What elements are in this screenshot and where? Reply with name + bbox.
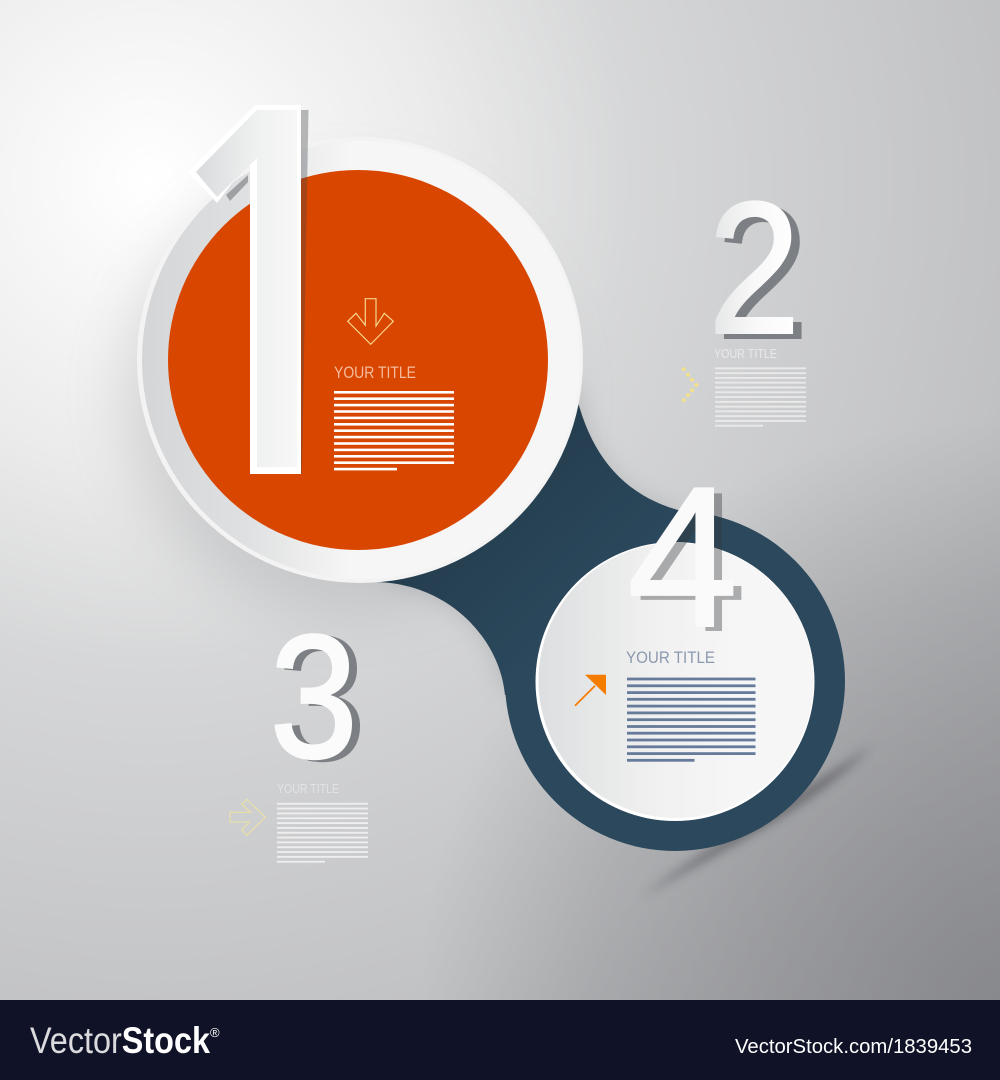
panel: block 2 [682, 346, 806, 427]
image id: VectorStock.com/1839453 [735, 1036, 972, 1058]
text lines [277, 803, 368, 863]
icon: orange arrow [575, 675, 606, 706]
footer banner [0, 1000, 1000, 1080]
dark ring [505, 511, 845, 851]
numeral 3 face: 3 [270, 599, 358, 795]
icon: right arrow [230, 799, 265, 835]
heading: YOUR TITLE [714, 346, 777, 361]
panel: large circle [137, 137, 583, 583]
panel: white disc [536, 542, 814, 821]
numeral 3 [270, 599, 366, 797]
soft shadow around connector [380, 380, 680, 700]
numeral 2 face: 2 [709, 165, 800, 373]
numeral 3 shadow: 3 [278, 601, 366, 797]
logo wordmark: VectorStock [30, 1020, 210, 1061]
soft shadow under the large circle [125, 180, 555, 610]
panel: block 4 [575, 648, 756, 762]
icon: down arrow [348, 299, 393, 344]
numeral 1 [196, 105, 308, 474]
panel: block 3 [230, 782, 368, 863]
heading: YOUR TITLE [277, 782, 339, 796]
outer ring edge [137, 137, 583, 583]
numeral 1 edge: 1 [124, 0, 423, 589]
text lines [334, 391, 454, 470]
disc highlight edge [536, 542, 814, 821]
outer ring face [142, 141, 580, 579]
connector shape [375, 375, 700, 700]
numeral 2 [708, 165, 809, 378]
text lines [627, 678, 756, 762]
dark connector and ring [375, 375, 845, 851]
long cast shadow of dark circle [640, 745, 872, 898]
numeral 2 shadow: 2 [717, 170, 809, 378]
numeral 1 stem shadow [301, 110, 308, 474]
icon: dotted chevron [682, 367, 698, 402]
heading: YOUR TITLE [626, 648, 715, 667]
panel: orange text block [334, 299, 454, 470]
registered mark: ® [210, 1025, 220, 1040]
numeral 4 face: 4 [627, 446, 738, 669]
heading: YOUR TITLE [334, 363, 416, 382]
numeral 4 [627, 446, 747, 674]
banner background [0, 1000, 1000, 1080]
numeral 1 face: 1 [124, 0, 423, 589]
disc face [538, 543, 814, 818]
text lines [715, 367, 806, 427]
orange disc [168, 170, 548, 550]
numeral 1 flag shadow [226, 175, 248, 201]
numeral 4 shadow: 4 [636, 451, 747, 674]
